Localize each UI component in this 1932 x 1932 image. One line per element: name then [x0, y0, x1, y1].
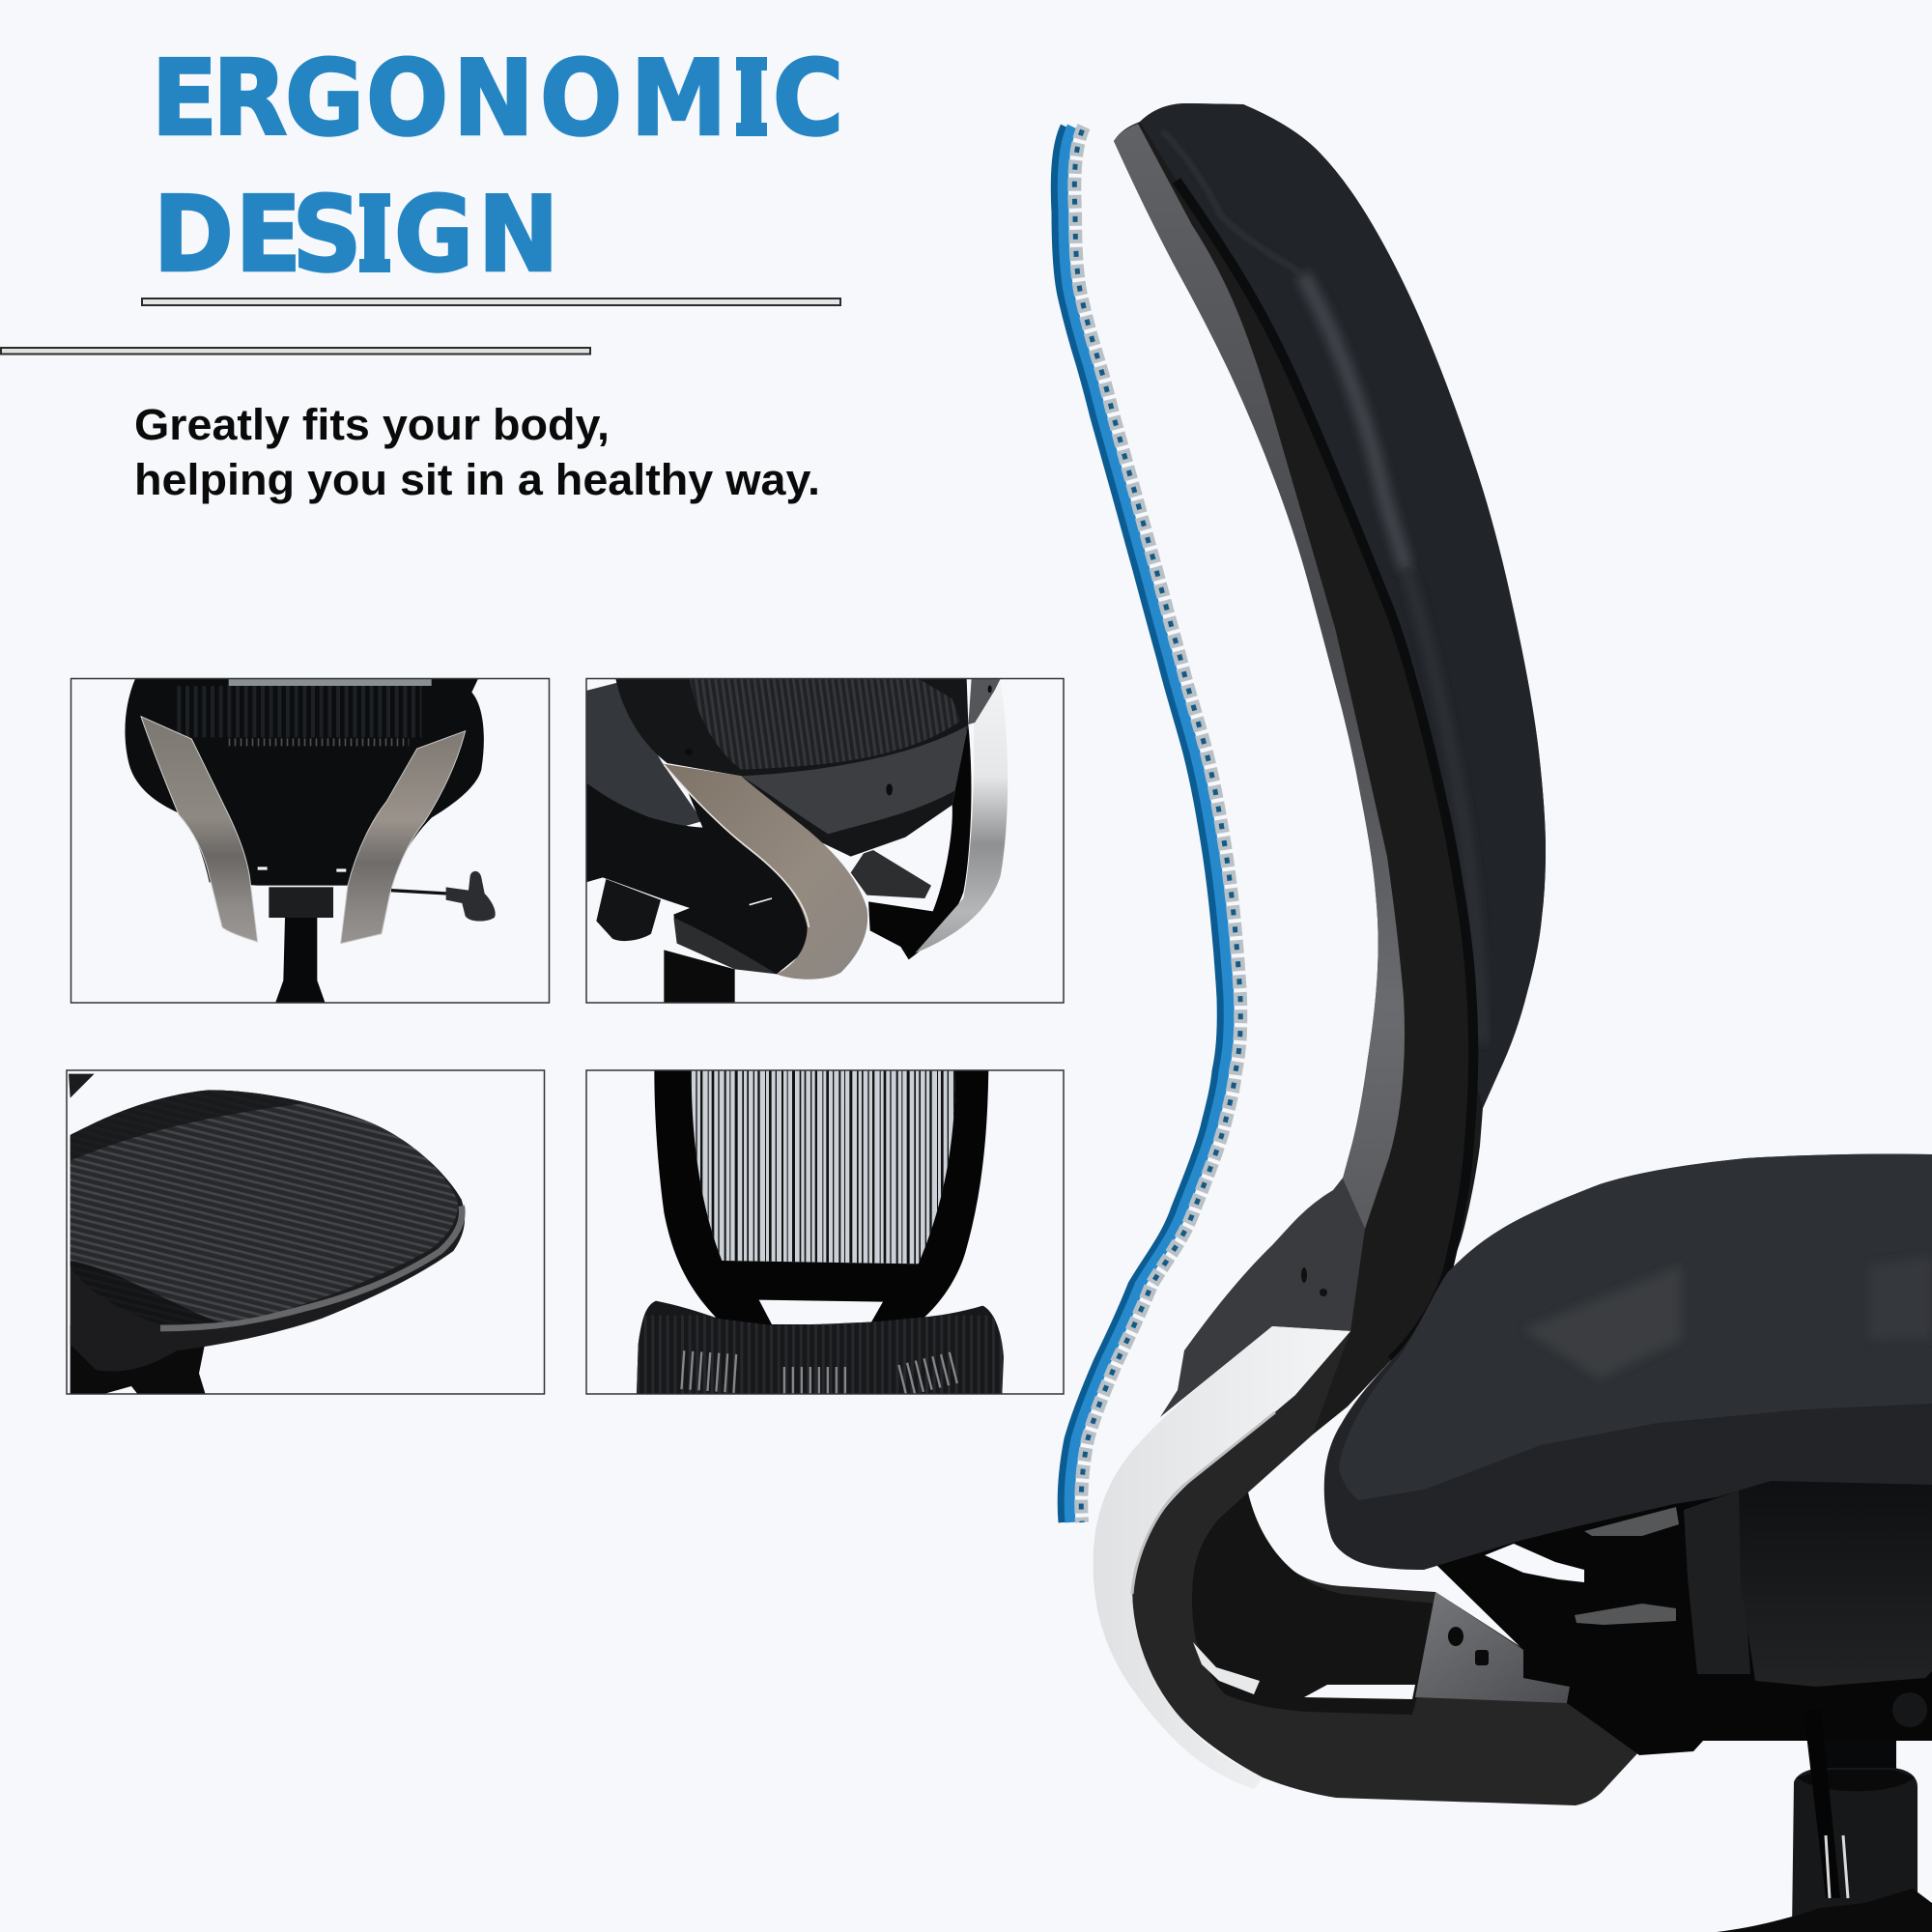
small slot [750, 898, 772, 905]
mesh window [690, 1070, 957, 1269]
tagline text [134, 400, 820, 504]
panel: armrest rear view [125, 679, 496, 1003]
knob [596, 879, 661, 941]
mesh lower streak [1406, 570, 1483, 1043]
gap under seat [1485, 1544, 1584, 1582]
seat mesh highlight [1523, 1265, 1681, 1378]
lower back frame band [1132, 1331, 1640, 1805]
lower opening [759, 1300, 883, 1324]
base plate [673, 918, 777, 974]
grey corner plate [968, 679, 1001, 724]
mesh light streak [1302, 274, 1406, 570]
divider under title [142, 298, 840, 305]
cushion ribs [637, 1232, 1006, 1483]
gas cylinder [1792, 1768, 1918, 1932]
back groove [1177, 181, 1473, 1360]
headrest cushion [637, 1301, 1004, 1394]
mechanism column block [1739, 1481, 1932, 1687]
inner frame black [1192, 1492, 1435, 1715]
back mesh [690, 679, 960, 770]
seat mesh right highlight [1869, 1256, 1932, 1340]
gas lift pole [664, 950, 735, 1003]
tagline text: helping you sit in a healthy way. [134, 455, 820, 504]
mesh upper ribs [178, 686, 421, 738]
rim highlight [160, 1206, 462, 1328]
panel 1 frame [71, 678, 549, 1003]
top corner of back [69, 1074, 95, 1098]
seat mesh [70, 1090, 458, 1323]
seat mesh [1339, 1154, 1932, 1500]
trim shadow line [1132, 1412, 1275, 1594]
back grey edge strip [1114, 124, 1405, 1229]
clip lever [851, 850, 931, 898]
chair underbody [586, 773, 815, 974]
backrest silhouette [1114, 103, 1546, 1435]
white curved trim [1094, 1326, 1350, 1789]
lever rod [1804, 1710, 1840, 1898]
lever rod [391, 891, 447, 894]
dark mesh lower shade [71, 1261, 225, 1325]
seat legs [71, 1325, 206, 1394]
spine bead centres [1074, 127, 1240, 1522]
bracket holes [1448, 1627, 1489, 1665]
panel 3 frame [67, 1070, 545, 1394]
chair base [1717, 1889, 1932, 1932]
cushion mesh patches [682, 1366, 959, 1381]
mesh thin upper streak [1162, 131, 1302, 274]
right chrome rim [915, 681, 1008, 953]
title letter I serifs [359, 57, 767, 272]
seat underside grey [586, 683, 702, 828]
tagline text: Greatly fits your body, [134, 400, 610, 449]
title [152, 38, 844, 296]
divider above tagline [1, 348, 590, 354]
mechanism side plate [1684, 1491, 1750, 1674]
mesh bars [690, 867, 957, 1466]
back bolt [1892, 1692, 1927, 1727]
backrest mesh [1140, 103, 1546, 1108]
gas lift pole [275, 918, 326, 1003]
seat rim [71, 1090, 465, 1371]
main chair side view [1094, 103, 1932, 1932]
panel 2 frame [586, 678, 1064, 1003]
title: ERGONOMIC [152, 38, 844, 159]
spine vertebra beads [1074, 127, 1240, 1522]
panel: back and headrest mesh [637, 1070, 1006, 1394]
armrest highlight [664, 765, 809, 927]
panel: seat close-up [64, 1067, 482, 1394]
seat mount slots [258, 868, 346, 870]
seat and back silhouette [125, 679, 484, 886]
screw holes [685, 685, 992, 795]
mesh ribs [228, 738, 410, 746]
right armrest strap [341, 731, 466, 944]
grey band with hole [741, 726, 967, 834]
spine curve [1056, 127, 1240, 1522]
rear wedge behind back frame [1160, 1159, 1377, 1417]
mechanism arm highlights [1575, 1507, 1679, 1625]
title: DESIGN [154, 174, 559, 296]
dark mesh top shade [71, 1090, 308, 1161]
cylinder collar shade [1797, 1770, 1915, 1791]
lever white slits [1826, 1835, 1848, 1898]
metal armrest [663, 764, 867, 980]
post block [269, 887, 333, 918]
panel: armrest angled view [586, 679, 1008, 1003]
wedge bolts [1301, 1267, 1327, 1296]
metal bracket [1415, 1592, 1570, 1703]
lever knob [446, 871, 496, 922]
spine dark edge [1056, 127, 1222, 1522]
mechanism block [1435, 1468, 1932, 1755]
gas cylinder neck [1813, 1739, 1896, 1777]
left armrest strap [141, 717, 258, 942]
back frame [654, 1070, 988, 1331]
white slot [1193, 1642, 1260, 1694]
back frame [615, 679, 968, 857]
black inner strap [868, 724, 971, 959]
panel 4 frame [586, 1070, 1064, 1394]
lower gap [1304, 1685, 1415, 1699]
spine blue band [1063, 127, 1229, 1522]
seat rim [1324, 1154, 1932, 1570]
colored mesh strip [229, 679, 432, 686]
